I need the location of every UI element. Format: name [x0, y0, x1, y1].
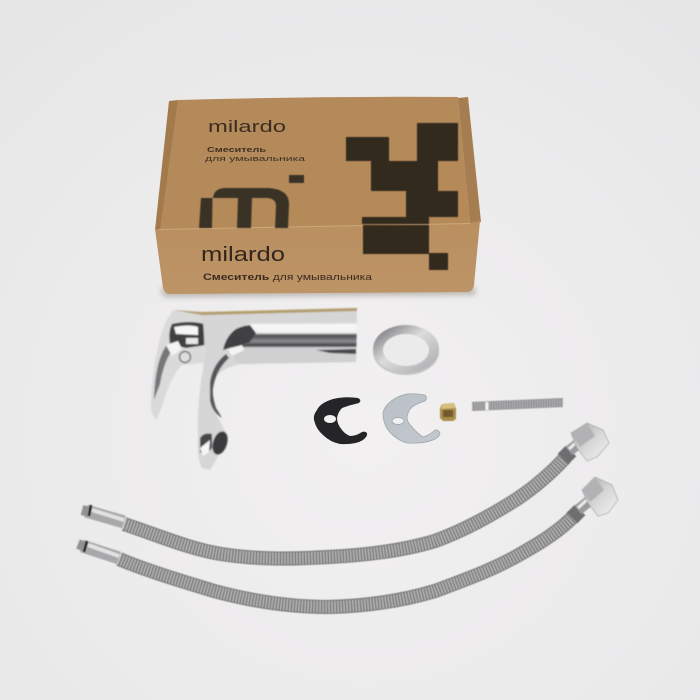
caption on top: Смеситель	[207, 145, 267, 154]
gold top edge	[174, 308, 357, 315]
logo milardo on front: milardo	[201, 244, 285, 266]
hose 2 right nut	[572, 477, 618, 518]
hose 2 left fitting	[78, 541, 119, 558]
metal plate	[383, 394, 440, 443]
flange ring	[373, 325, 439, 375]
spout reflections	[200, 325, 356, 456]
flexible hose 1	[82, 423, 609, 559]
big m logo	[199, 175, 304, 228]
box front panel	[155, 221, 480, 294]
black gasket	[314, 397, 367, 444]
aerator	[210, 429, 230, 457]
box top panel	[160, 97, 470, 230]
threaded rod	[472, 398, 563, 411]
box right flap	[458, 97, 481, 224]
flexible hose 2	[78, 477, 618, 607]
hose 1 left fitting	[82, 505, 124, 522]
faucet lever	[151, 310, 206, 420]
hose 1 right nut	[563, 423, 609, 461]
brass nut	[440, 403, 456, 421]
box left flap	[155, 100, 178, 230]
cardboard box	[155, 97, 481, 297]
faucet spout body	[198, 308, 357, 470]
faucet	[151, 308, 357, 470]
caption on front: Смеситель для умывальника	[203, 272, 373, 283]
caption on top	[205, 145, 306, 163]
logo milardo on top: milardo	[208, 118, 286, 136]
black pixel pattern	[346, 123, 458, 270]
hose 1 braid	[124, 458, 565, 559]
caption on top: для умывальника	[205, 154, 306, 163]
spout horizontal chrome	[232, 321, 357, 364]
hose 2 braid	[119, 516, 574, 607]
